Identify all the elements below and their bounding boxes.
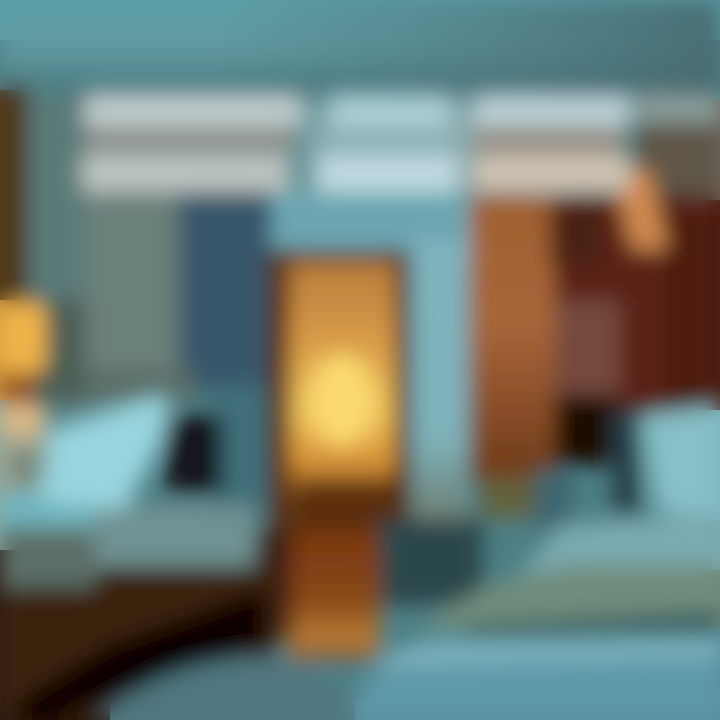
icon: table lamp — [0, 302, 46, 406]
panel: right wall — [470, 95, 720, 480]
pillow — [612, 410, 640, 515]
panel: floor — [262, 470, 573, 660]
bedding — [0, 485, 120, 530]
panel: central door — [268, 190, 470, 535]
bed frame — [0, 530, 272, 720]
dark gap — [165, 415, 223, 493]
door glow — [268, 250, 410, 535]
title line 1 — [85, 96, 630, 126]
ceiling — [0, 0, 720, 95]
title line 2 — [82, 156, 630, 192]
panel: left bed — [0, 395, 280, 720]
door frame — [272, 190, 470, 525]
bedding — [520, 512, 720, 575]
panel: right bed — [355, 405, 720, 720]
pillows — [0, 412, 50, 490]
panel: left wall — [0, 85, 273, 525]
title: blurred headline — [82, 96, 630, 192]
title backing — [300, 100, 475, 190]
title middle row — [85, 126, 625, 156]
panel: foreground cushion — [95, 658, 352, 720]
